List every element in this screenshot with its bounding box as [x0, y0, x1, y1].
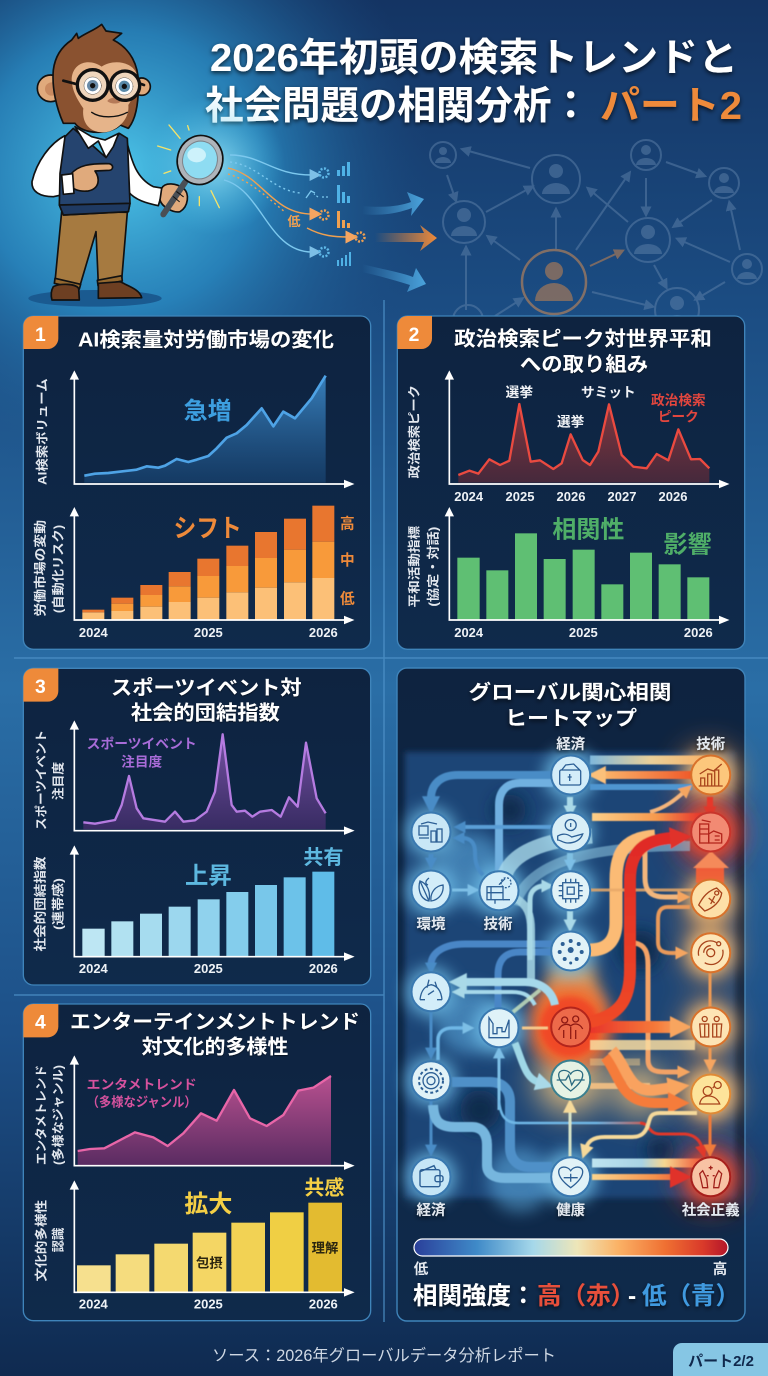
panel title — [70, 1010, 360, 1058]
bar chart: peace activity: 2025 — [569, 625, 598, 640]
node: person with idea — [691, 1074, 730, 1114]
line chart: sports attention: 注目度 — [50, 762, 65, 800]
stacked bar chart: labour market shift: シフト — [173, 515, 242, 543]
bar chart: cohesion index: 社会的団結指数 — [32, 856, 47, 951]
glasses — [63, 81, 144, 85]
stacked bar chart: labour market shift: 高 — [340, 515, 355, 532]
panel title: グローバル関心相関 — [468, 680, 672, 704]
node labels: 健康 — [556, 1201, 586, 1219]
bar chart: cohesion index: 2024 — [79, 961, 109, 976]
bar chart: cohesion index: (連帯感) — [50, 878, 65, 930]
area chart: entertainment trend: エンタメトレンド — [35, 1065, 49, 1165]
bar chart: peace activity: 影響 — [664, 531, 712, 558]
bar chart: cultural diversity: 共感 — [304, 1176, 344, 1200]
node: chip — [551, 871, 590, 910]
panel 4: entertainment vs cultural diversity — [23, 1004, 371, 1321]
bar chart: peace activity: 2026 — [684, 625, 713, 640]
ears — [37, 75, 64, 102]
node: technology factory — [480, 871, 518, 910]
panel frame — [23, 316, 371, 649]
node: orange money — [691, 880, 730, 918]
legend caption: 相関強度： — [413, 1282, 536, 1310]
line chart: sports attention: スポーツイベント — [34, 730, 49, 830]
panel title: への取り組み — [520, 353, 648, 376]
bar chart: peace activity — [407, 507, 720, 640]
big arrow blue lower — [362, 264, 426, 292]
title — [205, 37, 742, 128]
node: network — [551, 932, 590, 970]
part badge: パート2/2 — [688, 1353, 754, 1370]
correlation flows — [431, 760, 729, 1178]
magnifier — [163, 182, 185, 214]
stacked bar chart: labour market shift: (自動化リスク) — [50, 525, 65, 613]
line chart: AI search volume: AI検索ボリューム — [35, 378, 50, 485]
line chart: AI search volume — [35, 370, 345, 485]
line chart: sports attention — [34, 720, 345, 831]
node: economy wallet — [551, 756, 590, 794]
title: 社会問題の相関分析： — [205, 85, 590, 128]
legend caption — [413, 1282, 740, 1310]
line chart: political search peaks: 政治検索 — [651, 392, 706, 408]
stacked bar chart: labour market shift: 労働市場の変動 — [32, 520, 47, 617]
legend caption: - — [628, 1283, 636, 1310]
bar chart: cultural diversity — [34, 1176, 345, 1311]
pointing hand — [71, 164, 113, 191]
legend: colour scale: 高 — [713, 1261, 727, 1278]
node labels: 経済 — [556, 736, 586, 753]
icons: mini bar charts — [306, 162, 351, 266]
node: technology chart — [691, 756, 730, 794]
face — [72, 62, 137, 132]
panel title — [111, 676, 302, 724]
area chart: entertainment trend: (多様なジャンル) — [50, 1065, 65, 1165]
stacked bar chart: labour market shift: 低 — [340, 590, 355, 607]
legend: colour scale — [414, 1239, 728, 1278]
line chart: political search peaks — [407, 370, 720, 504]
line chart: political search peaks: ピーク — [658, 410, 699, 425]
part badge — [673, 1343, 768, 1376]
panel title: AI検索量対労働市場の変化 — [78, 328, 334, 351]
legend caption: 高（赤） — [537, 1282, 635, 1310]
number tab — [23, 668, 58, 702]
big arrow blue — [362, 192, 424, 216]
panel frame — [397, 668, 745, 1321]
node: skyline chart — [480, 1008, 518, 1047]
line chart: sports attention: 注目度 — [121, 753, 162, 769]
panel frame — [397, 316, 745, 649]
line chart: political search peaks: 2024 — [454, 489, 484, 504]
line chart: political search peaks: 2027 — [608, 489, 636, 504]
node: orbit — [691, 933, 730, 972]
node: industry red — [691, 812, 730, 852]
bar chart: cohesion index — [32, 845, 345, 976]
panel title — [468, 680, 672, 730]
area chart: entertainment trend — [35, 1055, 345, 1166]
heatmap backdrop glows — [405, 749, 740, 1212]
line chart: sports attention: スポーツイベント — [87, 737, 197, 752]
bar chart: cohesion index: 2026 — [309, 961, 338, 976]
vest — [59, 128, 130, 215]
number tab: 2 — [409, 325, 419, 346]
node: left gear — [412, 1061, 450, 1100]
number tab: 4 — [35, 1013, 46, 1034]
shoes — [51, 284, 79, 300]
panel title: 対文化的多様性 — [142, 1035, 288, 1058]
title: 2026年初頭の検索トレンドと — [210, 37, 738, 80]
node: people right — [691, 1008, 730, 1046]
panel title — [454, 328, 712, 376]
legend caption: 低（青） — [642, 1282, 740, 1310]
bar chart: cultural diversity: 2025 — [194, 1296, 223, 1311]
stacked bar chart: labour market shift: 2026 — [309, 625, 338, 640]
panel frame — [23, 668, 371, 985]
node labels: 環境 — [416, 916, 446, 933]
bar chart: cultural diversity: 2026 — [309, 1296, 338, 1311]
line chart: political search peaks: 2025 — [506, 489, 534, 504]
line chart: AI search volume: 急増 — [184, 398, 232, 425]
bar chart: cultural diversity: 文化的多様性 — [34, 1200, 49, 1281]
shirt right sleeve — [127, 141, 163, 206]
number tab — [23, 1004, 58, 1037]
sparkle rays — [158, 125, 219, 208]
bar chart: cohesion index: 共有 — [303, 846, 343, 869]
big arrow orange — [375, 225, 437, 251]
panel 2: political search vs peace — [397, 316, 745, 649]
number tab: 1 — [35, 325, 46, 346]
stacked bar chart: labour market shift — [32, 506, 355, 640]
panel title: スポーツイベント対 — [111, 676, 302, 699]
panel title: 社会的団結指数 — [131, 701, 280, 724]
node labels: 技術 — [484, 916, 513, 933]
line chart: political search peaks: 2026 — [557, 489, 585, 504]
number tab: 3 — [35, 677, 46, 698]
node labels — [416, 736, 740, 1219]
magnifier data flow — [145, 95, 364, 256]
number tab — [397, 316, 432, 349]
section dividers — [14, 300, 768, 1322]
line chart: political search peaks: 政治検索ピーク — [407, 385, 422, 478]
bar chart: peace activity: 2024 — [454, 625, 484, 640]
node: heart health — [551, 1157, 590, 1196]
node: environment leaves — [412, 870, 450, 910]
area chart: entertainment trend: （多様なジャンル） — [87, 1093, 197, 1109]
bar chart: cultural diversity: 2024 — [79, 1296, 109, 1311]
bar chart: cultural diversity: 認識 — [50, 1227, 65, 1252]
shirt left sleeve — [32, 136, 77, 197]
stacked bar chart: labour market shift: 2025 — [194, 625, 223, 640]
bar chart: cultural diversity: 理解 — [312, 1240, 338, 1255]
bar chart: cohesion index: 2025 — [194, 961, 223, 976]
stacked bar chart: labour market shift: 2024 — [79, 625, 109, 640]
panel title: ヒートマップ — [505, 707, 637, 730]
bar chart: cohesion index: 上昇 — [185, 862, 232, 888]
bar chart: peace activity: (協定・対話) — [425, 527, 440, 607]
node: wallet — [412, 1157, 450, 1196]
node: heart pulse — [551, 1060, 590, 1100]
panel 1: AI search vs labour market — [23, 316, 371, 649]
stacked bar chart: labour market shift: 中 — [340, 552, 355, 569]
background network diagram — [430, 140, 762, 335]
legend: colour scale: 低 — [414, 1261, 429, 1278]
mascot: monkey with magnifier — [28, 24, 228, 307]
line chart: political search peaks: 選挙 — [557, 413, 585, 429]
right hand — [160, 184, 187, 212]
title: パート2 — [600, 85, 742, 128]
line chart: political search peaks: 選挙 — [506, 384, 533, 400]
node: left mid globe people — [412, 972, 450, 1011]
trousers — [55, 212, 127, 286]
panel frame — [23, 1004, 371, 1321]
bar chart: cultural diversity: 拡大 — [184, 1191, 232, 1218]
node: centre people hot — [551, 1008, 590, 1046]
node labels: 技術 — [696, 736, 726, 753]
number tab — [23, 316, 58, 349]
collar — [75, 127, 119, 158]
area chart: entertainment trend: エンタメトレンド — [87, 1077, 197, 1092]
line chart: political search peaks: サミット — [581, 385, 636, 400]
node: left upper buildings — [412, 812, 450, 852]
node: social justice hands — [691, 1157, 730, 1196]
icons: gears and bars — [320, 168, 364, 256]
node labels: 経済 — [416, 1202, 446, 1219]
low label: 低 — [287, 214, 301, 229]
node labels: 社会正義 — [682, 1202, 740, 1219]
node: coin in hand — [551, 812, 590, 852]
panel 5: global correlation heatmap — [397, 668, 745, 1321]
panel title: エンターテインメントトレンド — [70, 1010, 360, 1033]
bar chart: cultural diversity: 包摂 — [196, 1255, 223, 1271]
line chart: political search peaks: 2026 — [659, 489, 687, 504]
source line: ソース：2026年グローバルデータ分析レポート — [212, 1346, 556, 1365]
panel 3: sports events vs social cohesion — [23, 668, 371, 985]
bar chart: peace activity: 平和活動指標 — [407, 525, 422, 607]
panel title: 政治検索ピーク対世界平和 — [454, 328, 712, 351]
head — [53, 24, 138, 132]
bar chart: peace activity: 相関性 — [552, 517, 624, 544]
